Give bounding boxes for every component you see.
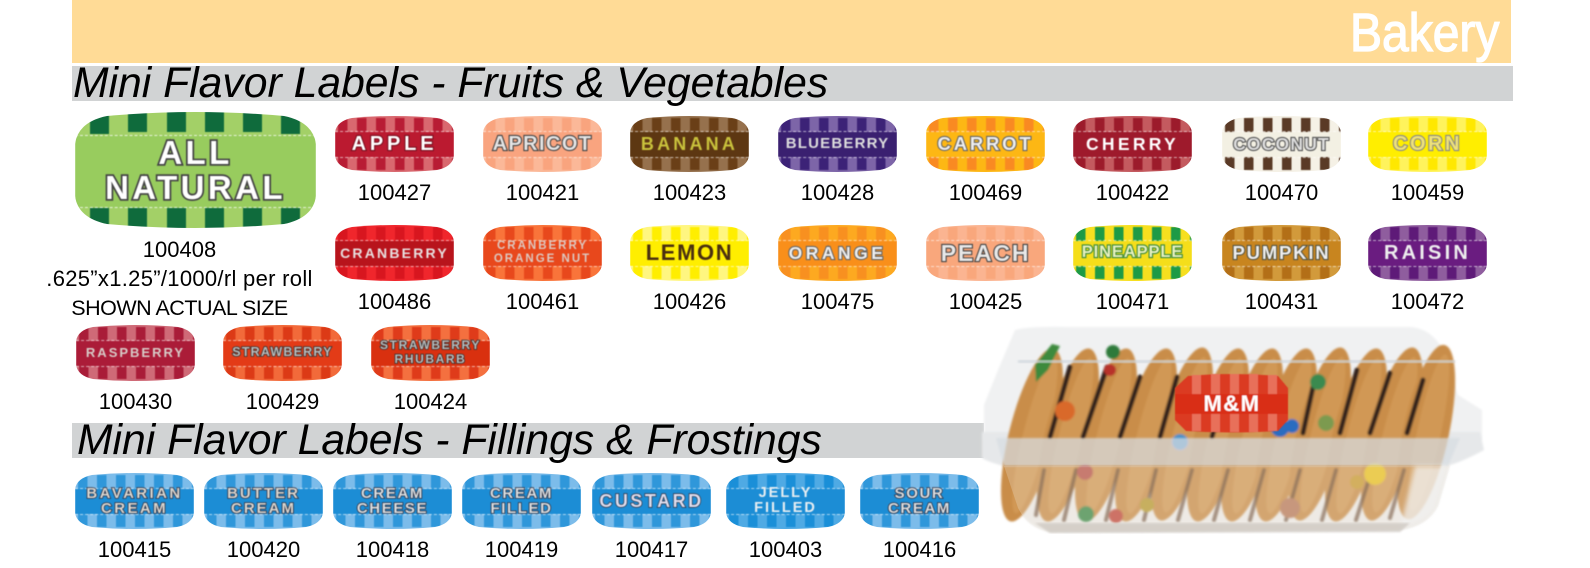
label: Custard — [592, 473, 711, 562]
code and size text — [46, 237, 313, 320]
header band — [72, 0, 1511, 63]
label: Lemon: 100426 — [653, 289, 726, 314]
code and size text: .625”x1.25”/1000/rl per roll — [46, 266, 313, 291]
large label: All Natural — [46, 112, 316, 320]
label: Jelly Filled: JELLY — [759, 485, 812, 501]
label: Apple: APPLE — [352, 132, 437, 154]
label: Cream Filled — [462, 473, 581, 562]
label: Jelly Filled — [726, 473, 845, 562]
label: Cream Cheese: 100418 — [356, 537, 429, 562]
label: Raspberry: 100430 — [99, 389, 172, 414]
heading: Fruits & Vegetables: Mini Flavor Labels - Fruits & Vegetables — [73, 59, 828, 107]
label: Carrot — [926, 116, 1045, 205]
tray base — [1004, 464, 1450, 532]
label: Blueberry: 100428 — [801, 180, 874, 205]
product label: M&M — [1175, 374, 1288, 432]
label: Bavarian Cream — [75, 473, 194, 562]
label: Custard: CUSTARD — [599, 491, 704, 511]
label: Cream Cheese — [333, 473, 452, 562]
label: Cranberry: 100486 — [358, 289, 431, 314]
label: Orange: 100475 — [801, 289, 874, 314]
label: Butter Cream: BUTTER — [227, 485, 300, 502]
label: Apricot: APRICOT — [493, 132, 592, 154]
label: Banana — [630, 116, 749, 205]
label: Custard: 100417 — [615, 537, 688, 562]
label: Cranberry: CRANBERRY — [340, 245, 449, 261]
label: Strawberry Rhubarb — [371, 325, 490, 414]
soft gaps between cookies, lower — [1036, 470, 1404, 520]
base bottom edge — [1035, 523, 1410, 533]
clear lid — [984, 327, 1482, 440]
label: Sour Cream: CREAM — [888, 500, 951, 517]
label: Strawberry Rhubarb: RHUBARB — [395, 352, 466, 366]
label: Raisin: RAISIN — [1384, 242, 1471, 264]
label: Pumpkin — [1222, 225, 1341, 314]
label: Peach — [926, 225, 1045, 314]
label: Cranberry Orange Nut: 100461 — [506, 289, 579, 314]
label: Lemon: LEMON — [646, 240, 733, 265]
label: Cream Filled: FILLED — [490, 500, 553, 517]
label: Raspberry — [76, 325, 195, 414]
label: Apricot: 100421 — [506, 180, 579, 205]
base haze — [1004, 466, 1450, 532]
label: Apple: 100427 — [358, 180, 431, 205]
label: Lemon — [630, 225, 749, 314]
label artwork: ALL — [158, 134, 233, 171]
label: Jelly Filled: 100403 — [749, 537, 822, 562]
label: Apple — [335, 116, 454, 205]
label: Cranberry — [335, 225, 454, 314]
cookies — [988, 340, 1467, 527]
label: Butter Cream: CREAM — [231, 500, 296, 517]
label: Butter Cream: 100420 — [227, 537, 300, 562]
label: Raisin: 100472 — [1391, 289, 1464, 314]
label: Jelly Filled: FILLED — [754, 500, 817, 516]
label: Peach: PEACH — [941, 240, 1030, 266]
section band: fruits and vegetables — [72, 66, 1513, 101]
label: Carrot: 100469 — [949, 180, 1022, 205]
label: Corn: 100459 — [1391, 180, 1464, 205]
label artwork — [75, 110, 316, 230]
label: Apricot — [483, 116, 602, 205]
heading: Fillings & Frostings: Mini Flavor Labels - Fillings & Frostings — [77, 416, 822, 464]
photo: cookies in a clear clamshell tray with M&M label — [982, 327, 1484, 534]
label: Cream Cheese: CHEESE — [357, 500, 428, 517]
candies — [1035, 344, 1386, 523]
label: Coconut: COCONUT — [1233, 134, 1330, 154]
label: Raspberry: RASPBERRY — [86, 345, 185, 360]
label: Cherry — [1073, 116, 1192, 205]
product label: M&M: M&M — [1203, 391, 1261, 416]
dark gaps between cookies, upper — [1050, 367, 1423, 437]
label: Cream Cheese: CREAM — [361, 485, 424, 502]
label: Sour Cream — [860, 473, 979, 562]
label: Corn — [1368, 116, 1487, 205]
code and size text: SHOWN ACTUAL SIZE — [71, 296, 288, 320]
section band: fillings and frostings — [72, 423, 984, 458]
label: Carrot: CARROT — [938, 133, 1033, 154]
label: Pumpkin: PUMPKIN — [1233, 242, 1330, 263]
label: Cranberry Orange Nut: CRANBERRY — [497, 240, 588, 252]
label: Sour Cream: SOUR — [895, 485, 944, 502]
base right clear area — [1400, 466, 1448, 528]
label: Strawberry — [223, 325, 342, 414]
label: Strawberry: 100429 — [246, 389, 319, 414]
label: Cream Filled: CREAM — [490, 485, 553, 502]
label: Cherry: 100422 — [1096, 180, 1169, 205]
label: Strawberry Rhubarb: 100424 — [394, 389, 467, 414]
label: Pineapple: 100471 — [1096, 289, 1169, 314]
code and size text: 100408 — [143, 237, 216, 262]
label: Raisin — [1368, 225, 1487, 314]
label: Corn: CORN — [1393, 132, 1462, 154]
label: Bavarian Cream: 100415 — [98, 537, 171, 562]
label: Blueberry — [778, 116, 897, 205]
label: Coconut — [1222, 116, 1341, 205]
heading: Bakery: Bakery — [1350, 4, 1499, 63]
label artwork: NATURAL — [105, 169, 286, 206]
tray rim — [982, 432, 1484, 466]
label: Cream Filled: 100419 — [485, 537, 558, 562]
label: Cranberry Orange Nut: ORANGE NUT — [494, 253, 591, 265]
label: Banana: 100423 — [653, 180, 726, 205]
label: Coconut: 100470 — [1245, 180, 1318, 205]
label: Peach: 100425 — [949, 289, 1022, 314]
label: Pineapple — [1073, 225, 1192, 314]
label: Banana: BANANA — [641, 134, 738, 154]
lid highlight — [1018, 360, 1455, 363]
label: Butter Cream — [204, 473, 323, 562]
label: Strawberry Rhubarb: STRAWBERRY — [380, 338, 481, 352]
label: Cherry: CHERRY — [1086, 134, 1179, 154]
label: Pineapple: PINEAPPLE — [1082, 243, 1183, 261]
label: Orange: ORANGE — [789, 243, 886, 263]
label: Orange — [778, 225, 897, 314]
label: Blueberry: BLUEBERRY — [786, 135, 889, 152]
label: Pumpkin: 100431 — [1245, 289, 1318, 314]
label: Strawberry: STRAWBERRY — [232, 345, 333, 359]
rim translucent band — [996, 438, 1460, 466]
label: Sour Cream: 100416 — [883, 537, 956, 562]
label: Cranberry Orange Nut — [483, 225, 602, 314]
label: Bavarian Cream: BAVARIAN — [86, 485, 183, 502]
label: Bavarian Cream: CREAM — [101, 500, 168, 517]
